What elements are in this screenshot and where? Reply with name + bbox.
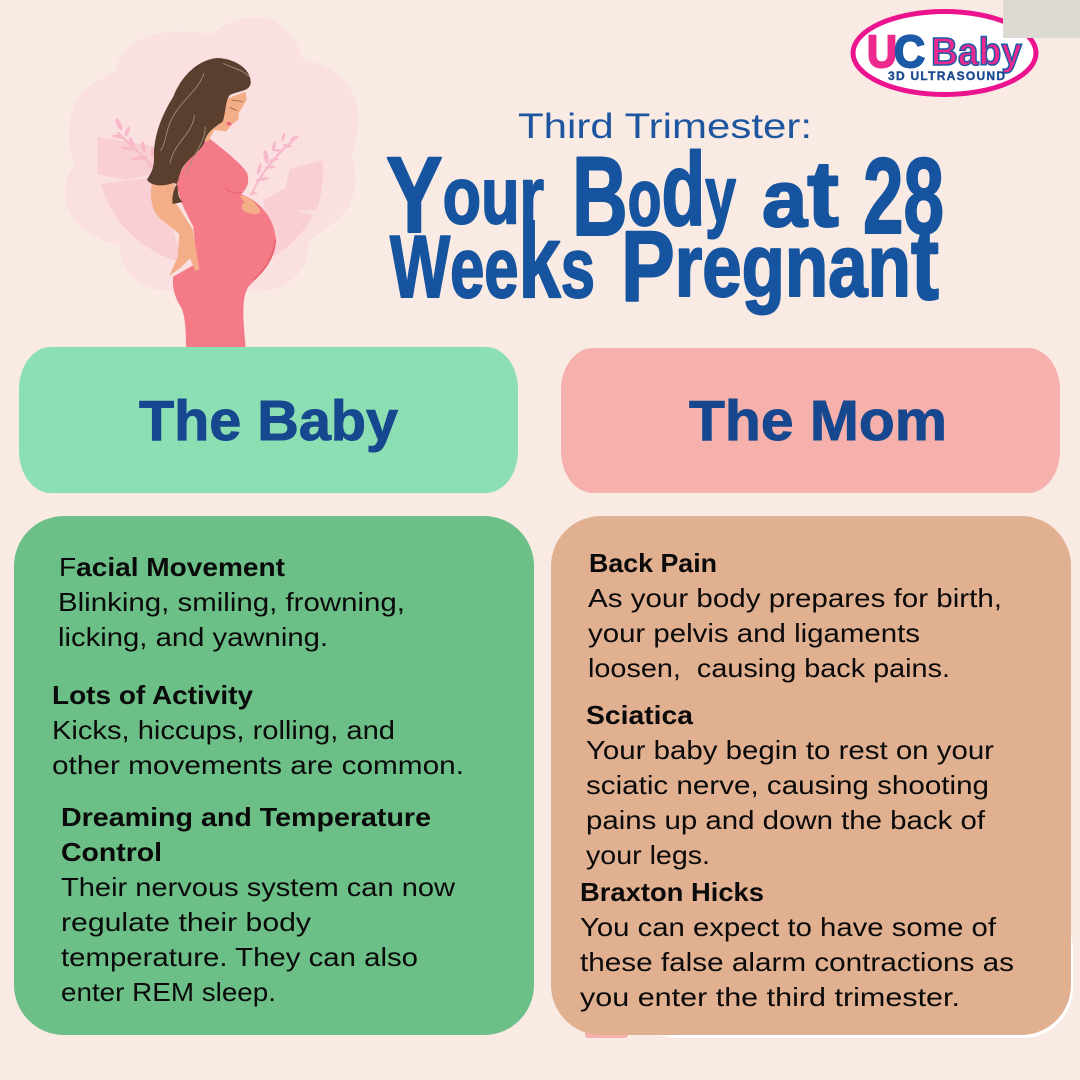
title: o <box>628 153 661 242</box>
left branch <box>111 117 156 169</box>
face and neck <box>198 92 247 142</box>
text block: Dreaming and Temperature Control: Dreaming and Temperature <box>61 802 431 832</box>
text block: Braxton Hicks: these false alarm contractions as <box>580 947 1014 977</box>
header text: The Mom <box>689 389 947 453</box>
title: t <box>911 205 939 322</box>
text block: Dreaming and Temperature Control: temperature. They can also <box>61 942 418 972</box>
hair <box>147 58 251 204</box>
text block: Dreaming and Temperature Control: Control <box>61 837 162 867</box>
text block: Back Pain: As your body prepares for birth, <box>588 583 1002 613</box>
text block: Sciatica: pains up and down the back of <box>586 805 986 835</box>
panel background <box>551 516 1071 1035</box>
background leaves <box>97 137 323 263</box>
text block: Lots of Activity: Kicks, hiccups, rolling, and <box>52 715 395 745</box>
text block: Back Pain: loosen, causing back pains. <box>588 653 950 683</box>
dress <box>173 136 276 347</box>
title: y <box>705 150 736 239</box>
logo: UC Baby 3D Ultrasound <box>853 12 1036 94</box>
white edge behind panel <box>628 900 1073 1038</box>
text block: Sciatica <box>586 700 994 870</box>
panel: The Baby details <box>14 516 534 1035</box>
title: B <box>572 134 628 259</box>
title: P <box>621 211 675 323</box>
illustration: pregnant woman <box>65 17 358 347</box>
text block: Sciatica: Your baby begin to rest on your <box>586 735 994 765</box>
text block: Dreaming and Temperature Control <box>61 802 455 1007</box>
text block: Facial Movement: Facial Movement <box>59 552 285 582</box>
panel: The Mom details <box>551 516 1073 1038</box>
panel background <box>14 516 534 1035</box>
subtitle: Third Trimester: <box>518 107 812 146</box>
lips <box>227 122 231 125</box>
face details <box>230 100 243 111</box>
header box <box>19 347 518 493</box>
header box <box>561 348 1060 493</box>
text block: Lots of Activity: other movements are common. <box>52 750 464 780</box>
title: Y <box>386 134 443 255</box>
text block: Dreaming and Temperature Control: Their nervous system can now <box>61 872 455 902</box>
text block: Sciatica: sciatic nerve, causing shooting <box>586 770 989 800</box>
title: d <box>661 132 705 248</box>
logo letter U: U <box>867 26 897 77</box>
text block: Facial Movement: Blinking, smiling, frowning, <box>58 587 405 617</box>
text block: Back Pain: Back Pain <box>589 548 717 578</box>
title: our <box>443 151 544 240</box>
back arm <box>151 180 199 276</box>
logo tagline: 3D ULTRASOUND <box>888 69 1005 83</box>
text block: Braxton Hicks: You can expect to have some of <box>580 912 997 942</box>
dress shading <box>226 189 275 279</box>
logo oval <box>853 12 1036 94</box>
title <box>386 132 944 323</box>
text block: Facial Movement: licking, and yawning. <box>58 622 328 652</box>
text block: Lots of Activity <box>52 680 464 780</box>
text block: Lots of Activity: Lots of Activity <box>52 680 254 710</box>
text block: Sciatica: your legs. <box>586 840 710 870</box>
front hand <box>240 196 261 214</box>
text block: Sciatica: Sciatica <box>586 700 694 730</box>
panel header: The Baby <box>19 347 518 493</box>
header text: The Baby <box>139 389 398 453</box>
panel header: The Mom <box>561 348 1060 493</box>
title: Weeks <box>390 203 595 320</box>
right branch <box>249 133 299 196</box>
text block: Braxton Hicks: you enter the third trimester. <box>580 982 960 1012</box>
corner patch <box>1003 0 1080 38</box>
title: 28 <box>863 135 944 256</box>
title: at <box>762 141 839 246</box>
logo word Baby: Baby <box>931 31 1022 74</box>
logo letter C: C <box>894 26 925 77</box>
text block: Dreaming and Temperature Control: enter REM sleep. <box>61 977 276 1007</box>
hair highlights <box>161 63 249 175</box>
text block: Braxton Hicks: Braxton Hicks <box>580 877 764 907</box>
text block: Facial Movement <box>58 552 405 652</box>
text block: Braxton Hicks <box>580 877 1014 1012</box>
text block: Dreaming and Temperature Control: regulate their body <box>61 907 311 937</box>
pink sliver behind panel <box>585 1020 628 1038</box>
text block: Back Pain: your pelvis and ligaments <box>588 618 920 648</box>
text block: Back Pain <box>588 548 1002 683</box>
title: regnan <box>675 216 911 315</box>
pink cloud backdrop <box>65 17 358 292</box>
